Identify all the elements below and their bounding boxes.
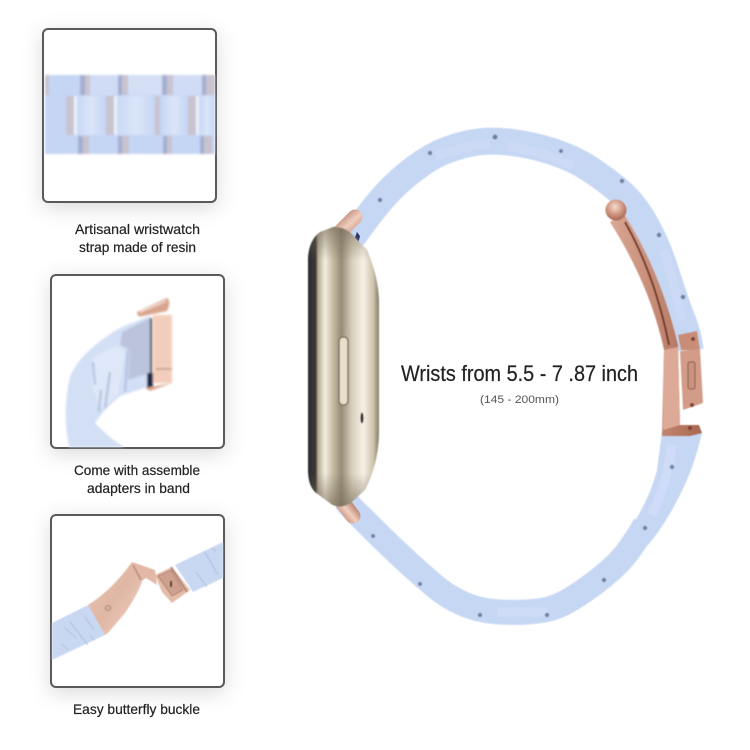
- strap: top section: [352, 134, 690, 350]
- caption: assemble adapters: Come with assemble: [74, 462, 200, 478]
- image: strap with adapter: [66, 298, 172, 447]
- panel: butterfly buckle: [51, 515, 224, 687]
- watch speaker slot: [360, 412, 364, 424]
- caption: resin strap: strap made of resin: [79, 239, 196, 255]
- folding clasp: [606, 200, 703, 436]
- heading: wrist size range: Wrists from 5.5 - 7 .87 inch: [401, 361, 638, 386]
- strap: bottom section: [345, 432, 702, 617]
- watch side button: [339, 337, 348, 405]
- watch body: [308, 227, 379, 507]
- caption: butterfly buckle: Easy butterfly buckle: [73, 701, 200, 717]
- caption: assemble adapters: [74, 462, 200, 496]
- caption: resin strap: [75, 221, 200, 255]
- image: resin strap links: [45, 75, 215, 154]
- caption: assemble adapters: adapters in band: [87, 480, 190, 496]
- main product: watch with strap: [308, 134, 703, 617]
- panel: assemble adapters: [51, 275, 224, 448]
- panel: resin strap: [43, 29, 216, 202]
- watch lugs: [338, 217, 360, 516]
- subheading: wrist size in millimetres: (145 - 200mm): [480, 394, 559, 406]
- caption: resin strap: Artisanal wristwatch: [75, 221, 200, 237]
- image: open butterfly buckle: [52, 542, 223, 660]
